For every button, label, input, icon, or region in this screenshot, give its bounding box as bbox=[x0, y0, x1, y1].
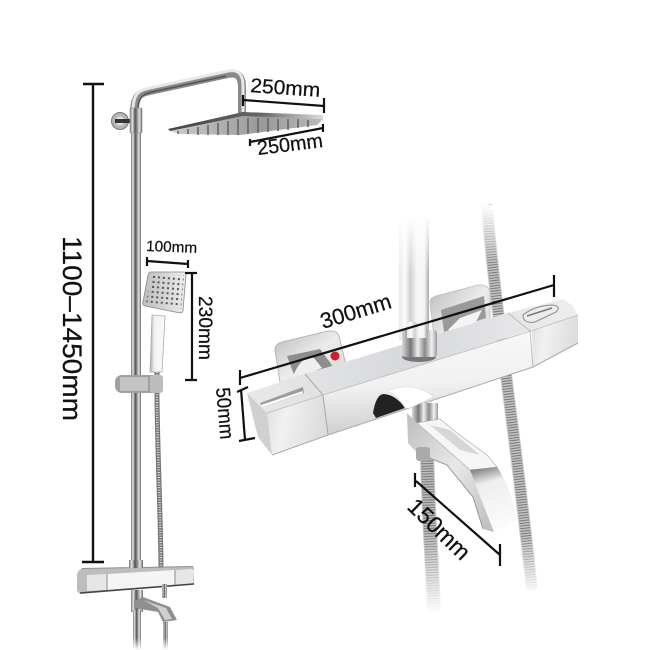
rail sleeve bbox=[130, 108, 142, 133]
left cap slot bbox=[260, 387, 304, 407]
long hose right bbox=[487, 205, 532, 590]
handset height dimension: 230mm bbox=[194, 296, 215, 360]
red temperature dot bbox=[330, 352, 340, 360]
valve height dimension bbox=[211, 387, 255, 441]
wall bracket bbox=[112, 112, 132, 130]
small full shower set bbox=[77, 71, 323, 650]
valve body bbox=[247, 299, 578, 455]
small spout bbox=[131, 590, 177, 622]
hand shower head bbox=[143, 272, 186, 313]
handset width dimension bbox=[146, 238, 197, 268]
rain shower head bbox=[168, 112, 323, 135]
dimension line bbox=[82, 84, 104, 562]
spout opening bbox=[373, 387, 433, 418]
spout neck bbox=[412, 403, 438, 433]
height dimension 1100-1450mm bbox=[57, 84, 104, 562]
spout curved front bbox=[470, 467, 517, 532]
valve length dimension: 300mm bbox=[317, 289, 394, 334]
head depth dimension bottom: 250mm bbox=[256, 130, 324, 160]
valve length dimension bbox=[240, 275, 554, 385]
overhead arm bbox=[133, 71, 243, 113]
hose below spout bbox=[420, 450, 450, 615]
head width dimension top bbox=[243, 75, 324, 113]
bath spout bbox=[407, 413, 517, 532]
handset height dimension bbox=[185, 273, 215, 380]
vertical riser pipe bbox=[395, 215, 435, 340]
main riser rail bbox=[131, 110, 141, 566]
hose fade ends bbox=[475, 205, 545, 595]
hand shower handle bbox=[150, 315, 165, 372]
lower pipes bbox=[130, 584, 170, 650]
pipe collar bbox=[402, 322, 437, 362]
hand shower holder bbox=[115, 375, 163, 393]
spout side face bbox=[407, 413, 494, 532]
shower hose bbox=[157, 372, 161, 570]
dimension text: 1100–1450mm bbox=[57, 236, 87, 421]
spout length dimension bbox=[403, 473, 500, 566]
enlarged valve detail bbox=[247, 205, 578, 615]
small thermostat body bbox=[77, 560, 194, 594]
valve height dimension: 50mm bbox=[211, 387, 237, 440]
hose connector bbox=[416, 447, 430, 461]
handset width dimension: 100mm bbox=[146, 238, 197, 257]
top knob bbox=[523, 305, 558, 322]
left mounting bracket bbox=[275, 331, 346, 385]
spout top face bbox=[417, 419, 497, 470]
spout length dimension: 150mm bbox=[403, 493, 476, 565]
right mounting bracket bbox=[430, 285, 490, 354]
head width dimension top: 250mm bbox=[250, 75, 321, 102]
